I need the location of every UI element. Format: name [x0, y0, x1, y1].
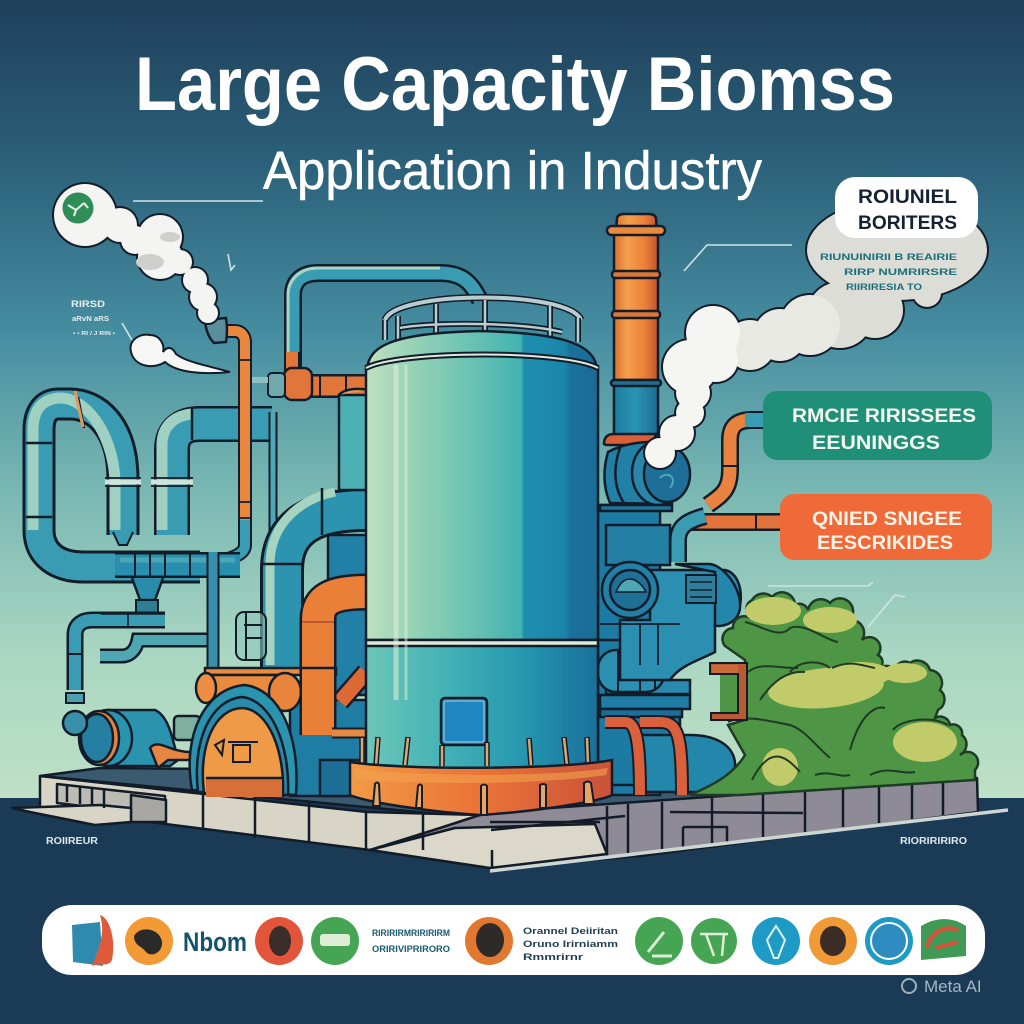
bar label: Nbom [183, 927, 247, 957]
orange frame near trees [710, 663, 747, 720]
upper teal loop pipe [288, 268, 480, 370]
second vertical pipe [151, 408, 273, 565]
main tank [350, 298, 612, 815]
boiler valve [236, 612, 266, 660]
small pointer marks [122, 245, 905, 627]
callout: green box [763, 391, 992, 460]
callout: orange box [780, 494, 992, 560]
bottom icon bar [42, 905, 985, 975]
bar text block 2 [523, 926, 618, 963]
callout: green box: EEUNINGGS [812, 433, 940, 454]
platform [12, 768, 978, 868]
big teal elbow behind tank [262, 488, 366, 670]
ground label right: RIORIRIRIRO [900, 836, 967, 847]
tank door [441, 698, 487, 745]
left small annotation: aRvN aRS [72, 316, 109, 323]
icon: logo mark [72, 915, 113, 966]
icon: green badge [62, 192, 94, 224]
small drifting cloud [131, 335, 230, 373]
lower left pipes [66, 552, 213, 703]
callout: white pill: ROIUNIEL [858, 187, 957, 208]
lower boiler machine [190, 668, 368, 797]
cloud small text: RIRP NUMRIRSRE [844, 267, 957, 278]
left drum [63, 710, 200, 768]
left small annotation [71, 299, 115, 337]
orange lower hoops [605, 722, 682, 795]
large U pipe [26, 391, 200, 567]
left small annotation: • • RI / J RIN • [73, 331, 115, 337]
subtitle rule [133, 200, 263, 202]
meta ai watermark: Meta AI [924, 977, 982, 996]
cloud small text: RIUNUINIRII B REAIRIE [820, 252, 957, 263]
thin orange riser pipe [205, 318, 252, 560]
tank lower shell [366, 645, 598, 770]
icon: blue ring [865, 917, 913, 965]
left pipework [26, 268, 480, 703]
icon: brown circle [465, 917, 513, 965]
bar text block 1: ORIRIVIPRIRORO [372, 944, 450, 955]
callout: orange box: EESCRIKIDES [817, 533, 953, 554]
callout: white pill [835, 177, 978, 238]
bar text block 2: Rmmrirnr [523, 952, 583, 963]
background [0, 0, 1024, 800]
orange elbow and coupling [252, 352, 366, 400]
platform light kerb [490, 810, 1008, 871]
right column and blower [598, 505, 741, 795]
tank railing [385, 298, 581, 342]
pipe manifold [115, 552, 240, 613]
left small annotation: RIRSD [71, 299, 106, 309]
base ring bolts [373, 782, 594, 815]
icon: green badge red arrow [921, 919, 966, 960]
bar text block 1 [372, 928, 450, 955]
bar text block 1: RIRIRIRMRIRIRIRM [372, 928, 450, 939]
icon: green circle [311, 917, 359, 965]
rear column [328, 389, 369, 695]
tank body [366, 354, 598, 640]
tank dome [367, 331, 597, 370]
right smoke cloud [643, 198, 989, 470]
dark ground band [0, 798, 1024, 1024]
bar text block 2: Oruno Irirniamm [523, 939, 618, 950]
cloud small text [820, 252, 957, 293]
title: Large Capacity Biomss [135, 42, 895, 127]
tree highlights [745, 597, 957, 786]
icon: blue crystal [752, 917, 800, 965]
icon: red circle [255, 917, 303, 965]
icon: green frame [691, 918, 737, 964]
ground label left: ROIIREUR [46, 836, 99, 847]
icon: green leaf [635, 917, 683, 965]
tank seam band [366, 354, 598, 368]
chimney stack [604, 214, 665, 445]
tank highlight [394, 365, 398, 700]
callout: white pill: BORITERS [858, 213, 957, 234]
icon: orange circle [125, 917, 173, 965]
orange boiler pipe [302, 592, 368, 735]
blower housing [600, 441, 690, 511]
left smoke plume [52, 182, 220, 325]
cloud small text: RIIRIRESIA TO [846, 282, 922, 293]
tank anchors [362, 737, 588, 766]
callout: green box: RMCIE RIRISSEES [792, 406, 976, 427]
trees [690, 592, 978, 795]
right orange elbow pipes [678, 420, 782, 562]
orange base ring [350, 760, 612, 815]
icon: orange biomass [809, 917, 857, 965]
callout: orange box: QNIED SNIGEE [812, 509, 962, 530]
subtitle: Application in Industry [263, 141, 762, 201]
bar text block 2: Orannel Deiiritan [523, 926, 618, 937]
